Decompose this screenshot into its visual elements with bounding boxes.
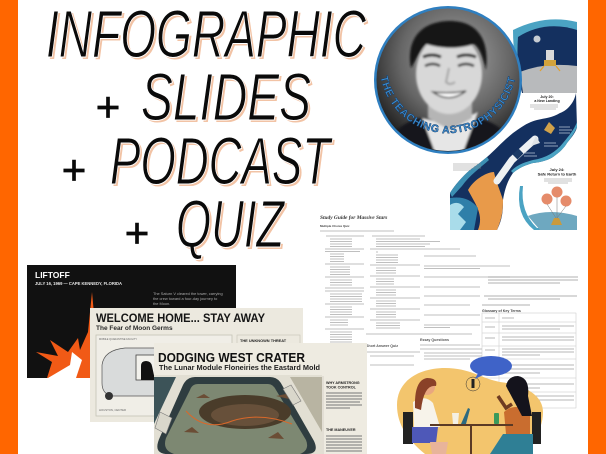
quiz lines column two	[370, 236, 460, 328]
threat panel	[237, 335, 300, 419]
july 24 heading: July 24:	[550, 167, 564, 172]
plus quiz	[125, 187, 287, 264]
shirt	[422, 112, 478, 155]
poster ribbon	[450, 93, 577, 230]
july 24 text	[544, 179, 572, 183]
brows	[423, 55, 476, 57]
tablet	[461, 408, 470, 424]
july 20 heading: July 20:	[540, 95, 554, 99]
liftoff date: JULY 16, 1969 — CAPE KENNEDY, FLORIDA	[35, 281, 122, 286]
trailer diagram panel	[96, 335, 232, 416]
answer key lines	[482, 277, 578, 305]
plus slides: SLIDES	[141, 60, 311, 135]
blue speech bubble	[470, 356, 512, 379]
glossary heading: Glossary of Key Terms	[482, 309, 521, 313]
plus slides	[96, 60, 313, 137]
green bottle	[494, 413, 499, 424]
face	[416, 34, 482, 114]
ribbon captions	[524, 127, 572, 156]
maneuver text	[326, 436, 362, 451]
side instruments	[155, 385, 301, 434]
crater title: DODGING WEST CRATER	[158, 350, 306, 365]
study guide document	[320, 215, 578, 408]
plus podcast: PODCAST	[112, 126, 335, 201]
short answer heading: Short Answer Quiz	[366, 344, 398, 348]
cockpit window	[154, 375, 322, 454]
left podcaster	[403, 378, 448, 454]
slide: liftoff: the Moon.	[153, 301, 170, 306]
slide: liftoff	[27, 265, 236, 378]
astronaut	[141, 361, 155, 380]
title	[46, 0, 368, 264]
essay questions heading: Essay Questions	[420, 338, 449, 342]
crater subtitle: The Lunar Module Floneiries the Eastard Mold	[159, 363, 320, 372]
splashdown circle	[519, 186, 577, 230]
trailer body	[102, 348, 155, 396]
threat heading: THE UNKNOWN THREAT	[240, 338, 287, 343]
flame highlight	[48, 352, 82, 378]
lunar lander	[540, 50, 560, 71]
cup	[452, 413, 459, 424]
ribbon lower teal edge	[511, 122, 577, 173]
new landing heading: a New Landing	[534, 99, 560, 103]
short answer lines	[366, 256, 510, 334]
control text	[326, 393, 362, 408]
infographic word: INFOGRAPHIC	[48, 0, 368, 74]
badge lettering: THE TEACHING ASTROPHYSICIST	[380, 75, 515, 134]
rocket flame cloud	[468, 172, 503, 230]
infographic word	[46, 0, 368, 74]
glossary table text	[485, 318, 574, 404]
lunar module in transit	[544, 122, 555, 134]
safe return heading: Safe Return to Earth	[538, 172, 577, 176]
podcast illustration	[397, 356, 543, 454]
control panel: TOOK CONTROL	[326, 386, 357, 390]
neck	[428, 98, 472, 130]
liftoff description: The Saturn V cleared the tower, carrying	[153, 291, 223, 296]
control panel	[323, 376, 362, 454]
diagram label: MOBILE QUARANTINE FACILITY	[99, 338, 137, 341]
rocket	[497, 136, 540, 181]
right orange border	[588, 0, 606, 454]
infographic poster	[450, 19, 577, 230]
microphone badge	[466, 377, 480, 391]
parachutes	[552, 186, 562, 198]
eyes	[425, 64, 474, 66]
suit	[397, 117, 500, 150]
plus podcast: PODCAST	[110, 124, 333, 199]
plus quiz: QUIZ	[176, 187, 285, 262]
liftoff heading: LIFTOFF	[35, 270, 70, 280]
study guide subheading: Multiple Choice Quiz	[320, 224, 350, 228]
crater	[199, 395, 291, 429]
smile	[433, 91, 466, 98]
essay lines	[366, 345, 482, 365]
plus slides: +	[96, 83, 120, 130]
july 20 text	[530, 105, 558, 109]
location label: HOUSTON, CENTER	[99, 408, 126, 412]
nose shade	[446, 68, 455, 84]
trailer window	[136, 355, 156, 380]
slide: dodging west crater	[154, 343, 367, 454]
plus podcast: +	[62, 146, 86, 193]
yellow backdrop	[397, 368, 543, 454]
plus slides: SLIDES	[143, 62, 313, 137]
table	[430, 424, 513, 426]
flight path	[186, 411, 292, 425]
capsule	[551, 218, 562, 225]
poster top panel	[513, 19, 577, 93]
plus quiz: +	[125, 209, 149, 256]
earth	[450, 197, 478, 230]
quiz lines column one	[320, 231, 394, 342]
left orange border	[0, 0, 18, 454]
rocks	[184, 394, 289, 439]
maneuver heading: THE MANEUVER	[326, 428, 356, 432]
slide: welcome home	[90, 308, 303, 422]
control heading: WHY ARMSTRONG	[326, 381, 360, 385]
left caption	[453, 164, 481, 170]
slide: liftoff: the crew toward a four-day journey to	[153, 296, 217, 301]
plus quiz: QUIZ	[178, 189, 287, 264]
ribbon upper teal edge	[450, 157, 489, 197]
trailer wheel	[105, 392, 113, 400]
hair	[410, 21, 487, 70]
flame	[36, 292, 95, 378]
circular portrait badge	[374, 6, 522, 154]
study guide title: Study Guide for Massive Stars	[320, 215, 387, 221]
right podcaster	[490, 376, 541, 454]
portrait	[397, 20, 500, 151]
welcome subtitle: The Fear of Moon Germs	[96, 325, 173, 332]
moon surface	[520, 65, 577, 93]
glossary table	[482, 313, 576, 408]
plus podcast	[62, 124, 335, 201]
moon	[534, 36, 540, 42]
welcome title: WELCOME HOME... STAY AWAY	[96, 311, 266, 325]
